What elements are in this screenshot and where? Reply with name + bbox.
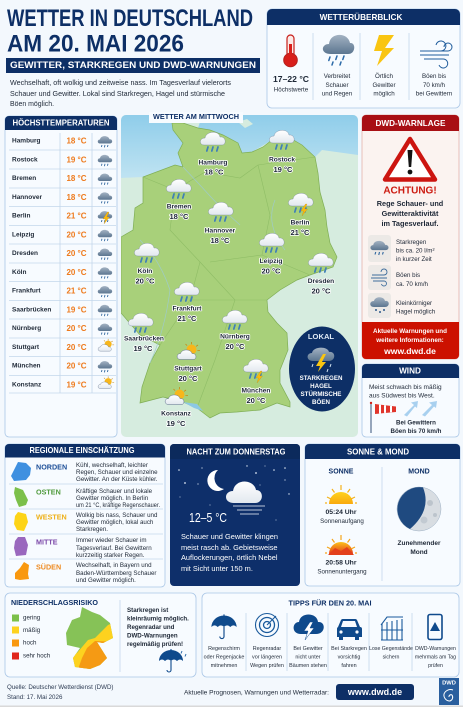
footer button [336,684,414,700]
city: Bremen: 18 °C [169,212,189,221]
region: Westen [14,512,158,532]
footer button: www.dwd.de [347,687,402,697]
city: Frankfurt [173,282,202,323]
city: Frankfurt: Frankfurt [173,306,202,312]
region: Mitte: Immer wieder Schauer im [76,536,146,544]
row: Saarbrücken: Saarbrücken [12,306,51,313]
city: Stuttgart [174,342,203,383]
row: Stuttgart [12,339,114,352]
city: Konstanz [161,387,192,428]
row: Saarbrücken [12,305,112,316]
gusts text: 70 km/h [423,82,446,88]
region: Norden: NORDEN [36,462,67,472]
city: Berlin: 21 °C [290,228,310,237]
DWD logo [439,678,459,705]
city: Nürnberg: Nürnberg [220,334,250,340]
stars [178,465,290,520]
region: Osten: Gewitter möglich. In Berlin [76,494,149,502]
tip: radar: Regenradar [253,646,281,652]
region: Mitte [14,536,152,558]
region: Mitte: MITTE [36,538,58,546]
city: Frankfurt: 21 °C [177,314,197,323]
icon: windsock [370,402,396,433]
intro text: Schauer und Gewitter. Lokal sind Starkregen, Hagel und stürmische [10,89,225,98]
city: Leipzig [259,233,284,276]
title: AM 20. MAI 2026 [7,30,184,58]
night temperature: 12–5 °C [189,511,227,525]
legend: hoch [23,640,37,646]
row: Nürnberg: Nürnberg [12,325,41,332]
row: Hannover [12,192,112,204]
panel: Regionale Einschätzung: REGIONALE EINSCHÄTZUNG [30,445,134,455]
panel: Niederschlagsrisiko: NIEDERSCHLAGSRISIKO [11,598,98,607]
warning: heavy rain [368,235,435,262]
city: Rostock: 19 °C [273,165,293,174]
tip: umbrella [204,614,244,669]
region: Norden [11,462,158,482]
panel: Nacht zum Donnerstag: NACHT ZUM DONNERSTAG [186,448,286,456]
panel: Nacht zum Donnerstag [170,444,300,586]
sunset time [317,560,367,576]
title [7,5,253,58]
tip: loose objects [369,617,413,660]
legend: mäßig [23,627,41,634]
panel: Tipps: TIPPS FÜR DEN 20. MAI [288,598,372,608]
showers text: Schauer [325,82,349,88]
panel: Sonne und Mond [305,444,460,586]
city: Stuttgart: 20 °C [178,374,198,383]
intro text: Wechselhaft, oft wolkig und zeitweise nass. Im Tagesverlauf vielerorts [10,78,231,87]
city: Saarbrücken: Saarbrücken [124,336,164,342]
region: Westen: Starkregen. [76,526,108,532]
city: Köln: 20 °C [135,276,155,286]
row: Rostock: 19 °C [66,155,87,164]
callout: Lokal: BÖEN [312,398,330,406]
risk text: Regenradar und [127,624,175,630]
row: Hamburg [12,136,112,147]
row: Frankfurt: Frankfurt [12,288,41,294]
panel: Höchsttemperaturen [5,116,117,437]
tip: radar: Wegen prüfen [250,663,284,669]
panel: Wind: WIND [399,366,421,376]
moon label: Zunehmender [398,540,441,546]
legend [12,614,51,660]
icon: rain cloud [323,35,354,65]
tip: loose objects: sichern [383,654,399,660]
row: Dresden: Dresden [12,250,38,257]
tip: umbrella: Regenschirm [208,646,240,652]
icon: lightning [374,35,394,66]
city: Köln [134,243,159,286]
tip: phone: mehrmals am Tag [415,654,456,660]
panel: Wetterüberblick: WETTERÜBERBLICK [320,12,402,22]
city: Rostock: Rostock [269,156,295,164]
city: Stuttgart: Stuttgart [174,366,203,372]
tip: car: fahren [341,663,357,669]
warning footer: Aktuelle Warnungen und [373,328,447,334]
moon label: Mond [410,548,428,556]
region: Süden: Wechselhaft, in Bayern und [76,562,152,568]
warning: hail: Hagel möglich [396,308,436,315]
region: Norden: Gewitter. An der Küste kühler. [76,476,158,482]
row: Konstanz [12,376,114,389]
city: Bremen [166,179,191,221]
city: Hamburg [199,132,227,176]
city: Hannover: Hannover [205,228,236,234]
night text: Auflockerungen, örtlich Nebel [181,552,278,562]
row: Köln [12,267,112,279]
panel: Tipps [202,593,459,677]
warning footer: weitere Informationen: [375,336,444,344]
night text: meist rasch ab. Gebietsweise [181,542,278,552]
thunderstorm text: möglich [373,90,395,97]
region: Osten: OSTEN [36,488,61,496]
warning footer [362,322,459,359]
row: Dresden: 20 °C [66,249,87,258]
warning: gusts [368,265,429,290]
tip: phone: DWD-Warnungen [415,646,456,652]
city: Rostock [269,130,295,174]
showers text: und Regen [322,90,353,97]
panel: Sonne und Mond: MOND [408,468,430,476]
sunrise time: Sonnenaufgang [320,518,364,525]
panel: weather map [121,112,358,437]
intro text: Böen möglich. [10,99,54,108]
panel: Wetterüberblick [267,9,460,108]
night text: Schauer und Gewitter klingen [181,532,278,540]
city: Konstanz: Konstanz [161,410,192,418]
city: Konstanz: 19 °C [166,419,186,428]
subtitle bar: GEWITTER, STARKREGEN UND DWD-WARNUNGEN [10,60,256,71]
city: Saarbrücken [124,313,164,353]
icon: moon [207,470,224,491]
row: Hannover: 18 °C [66,193,87,202]
tip: loose objects: Lose Gegenstände [369,646,413,652]
city: Bremen: Bremen [167,204,191,210]
night text: mit Sicht unter 150 m. [181,564,253,572]
city: Saarbrücken: 19 °C [133,344,153,353]
icon: wind arrows [404,401,437,416]
sunset time: Sonnenuntergang [317,568,367,576]
tip: umbrella: oder Regenjacke [204,654,244,660]
gusts text: Böen bis [422,72,446,80]
risk text: DWD-Warnungen [127,632,178,639]
sunrise time: 05:24 Uhr [326,509,357,516]
city: München: 20 °C [246,396,266,405]
city: Dresden: 20 °C [311,286,331,296]
warning: heavy rain: bis ca. 20 l/m² [396,247,435,254]
row: Leipzig [12,230,112,241]
high temperatures [273,74,309,94]
region: Osten: Kräftige Schauer und lokale [76,488,153,494]
tip: car [331,619,367,669]
panel: Niederschlagsrisiko [5,593,196,677]
region: Süden: und Gewitter möglich. [76,576,136,584]
region: Mitte: Tagesverlauf. Bei Gewittern [76,544,152,552]
legend: gering [23,614,41,622]
row: Hamburg: 18 °C [66,136,87,146]
tip: thunderstorm: Bäumen stehen [289,663,327,669]
legend: sehr hoch [23,652,51,660]
risk text: kleinräumig möglich. [127,615,189,622]
row: Berlin [12,211,112,224]
bottom edge [0,706,463,707]
city: Köln: Köln [138,268,152,275]
city: Berlin: Berlin [291,220,309,226]
city: Nürnberg [220,310,250,351]
row: Stuttgart: 20 °C [66,343,87,352]
warning: heavy rain: in kurzer Zeit [396,256,432,262]
warning text: im Tagesverlauf. [381,218,439,228]
row: Bremen: Bremen [12,175,36,182]
tip: thunderstorm [289,614,327,669]
map title: WETTER AM MITTWOCH [153,112,239,121]
city: Hamburg: 18 °C [204,168,224,176]
callout: Lokal: STÜRMISCHE [301,390,341,398]
city: Hamburg: Hamburg [199,160,227,166]
row: Nürnberg: 20 °C [66,324,87,333]
row: Nürnberg [12,324,112,335]
city: Nürnberg: 20 °C [225,342,245,351]
row: Frankfurt [12,286,112,297]
tip: phone [415,614,456,669]
high temperatures: Höchstwerte [274,86,309,94]
source: Stand: 17. Mai 2026 [7,694,63,700]
panel: Wind: Bei Gewittern [396,419,436,426]
region: Westen: Wolkig bis nass, Schauer und [76,512,158,518]
row: Frankfurt: 21 °C [66,286,87,296]
row: Rostock: Rostock [12,156,38,163]
row: Leipzig: 20 °C [66,230,87,239]
tip: thunderstorm: nicht unter [295,654,321,660]
gusts text: bei Gewittern [416,90,453,97]
row: Konstanz: Konstanz [12,381,42,388]
row: Rostock [12,155,112,166]
callout: Lokal: LOKAL [308,332,334,341]
warning: heavy rain: Starkregen [396,238,427,246]
panel: DWD-Warnlage: DWD-WARNLAGE [375,119,446,128]
icon: sunrise [325,485,357,504]
sunset time: 20:58 Uhr [326,560,357,566]
row: München: München [12,362,41,370]
callout: Lokal [289,326,355,412]
row: München: 20 °C [66,362,87,370]
panel: Wind: Böen bis 70 km/h [391,428,442,434]
region: Süden: SÜDEN [36,562,61,572]
row: Köln: 20 °C [66,268,87,277]
sunrise time [320,509,364,525]
subtitle bar [6,58,260,73]
city: Leipzig: Leipzig [260,258,282,265]
warning: hail: Kleinkörniger [396,300,432,306]
row: Bremen [12,174,112,185]
region: Osten [14,487,160,508]
row: Dresden [12,249,112,260]
warning footer: www.dwd.de [383,346,436,356]
icon: cloud with fog [226,482,265,514]
tip: radar: vor längeren [252,654,282,660]
row: München [12,361,112,372]
icon: moon phase [397,487,441,531]
footer prompt: Aktuelle Prognosen, Warnungen und Wetterradar: [184,690,329,696]
warning heading: ACHTUNG! [383,186,437,196]
risk text: regelmäßig prüfen! [127,640,183,648]
row: Konstanz: 19 °C [66,380,87,389]
DWD logo: DWD [442,680,456,686]
city: München [242,359,270,405]
row: Bremen: 18 °C [66,174,87,183]
title: WETTER IN DEUTSCHLAND [7,5,253,32]
city: Leipzig: 20 °C [261,266,281,276]
row: Hamburg: Hamburg [12,138,41,144]
region: Mitte: kurzzeitig starker Regen. [76,552,145,558]
callout: Lokal: HAGEL [310,382,332,390]
tip: phone: prüfen [428,663,443,669]
panel: Wind: aus Südwest bis West. [369,392,435,399]
panel: Sonne und Mond: SONNE [329,468,354,476]
region: Süden: Baden-Württemberg Schauer [76,570,156,576]
city: Dresden [308,253,334,296]
thunderstorm text: Örtlich [375,72,393,80]
row: Berlin: 21 °C [66,212,87,220]
intro text [10,78,231,108]
city: Dresden: Dresden [308,278,334,285]
tip: radar [250,614,284,669]
panel: Regionale Einschätzung [5,444,165,587]
tip: umbrella: mitnehmen [211,663,237,669]
row: Berlin: Berlin [12,212,30,220]
icon: warning triangle [385,139,435,180]
warning: gusts: Böen bis [396,272,420,278]
thunderstorm text: Gewitter [372,82,396,88]
panel: Höchsttemperaturen: HÖCHSTTEMPERATUREN [12,117,110,127]
panel: Wind [362,364,459,437]
risk text: Starkregen ist [127,606,168,614]
warning text: Gewitteraktivität [382,208,439,218]
row: Hannover: Hannover [12,194,42,201]
icon: wind [420,41,452,68]
icon: sunset [325,535,357,555]
region: Osten: um 21 °C, kräftige Regenschauer. [76,502,160,508]
region: Süden [15,562,156,584]
showers text: Verbreitet [324,72,351,80]
row: Saarbrücken: 19 °C [66,305,87,314]
region: Westen: Gewitter möglich, lokal auch [76,518,154,526]
row: Leipzig: Leipzig [12,231,34,238]
risk map [66,607,113,669]
high temperatures: 17–22 °C [273,74,309,84]
source: Quelle: Deutscher Wetterdienst (DWD) [7,684,113,690]
city: München: München [242,388,270,394]
city: Hannover: 18 °C [210,236,230,245]
tip: thunderstorm: Bei Gewitter [293,646,323,652]
region: Norden: Kühl, wechselhaft, leichter [76,462,148,468]
warning: hail [368,293,436,318]
panel: Wind: Meist schwach bis mäßig [369,384,442,390]
region: Westen: WESTEN [36,512,67,522]
city: Berlin [288,193,313,237]
row: Köln: Köln [12,269,26,276]
warning: gusts: ca. 70 km/h [396,280,429,288]
callout: Lokal: STARKREGEN [300,374,343,382]
tip: car: Bei Starkregen [331,646,367,652]
row: Stuttgart: Stuttgart [12,344,40,351]
warning text: Rege Schauer- und [377,198,443,208]
region: Norden: Regen, Schauer und einzelne [76,468,158,476]
icon: thermometer [284,35,297,67]
icon: umbrella [159,649,186,672]
panel: Sonne und Mond: SONNE & MOND [347,448,409,456]
tip: car: vorsichtig [338,654,360,660]
panel: DWD-Warnlage [362,115,459,359]
city: Hannover [205,202,236,245]
